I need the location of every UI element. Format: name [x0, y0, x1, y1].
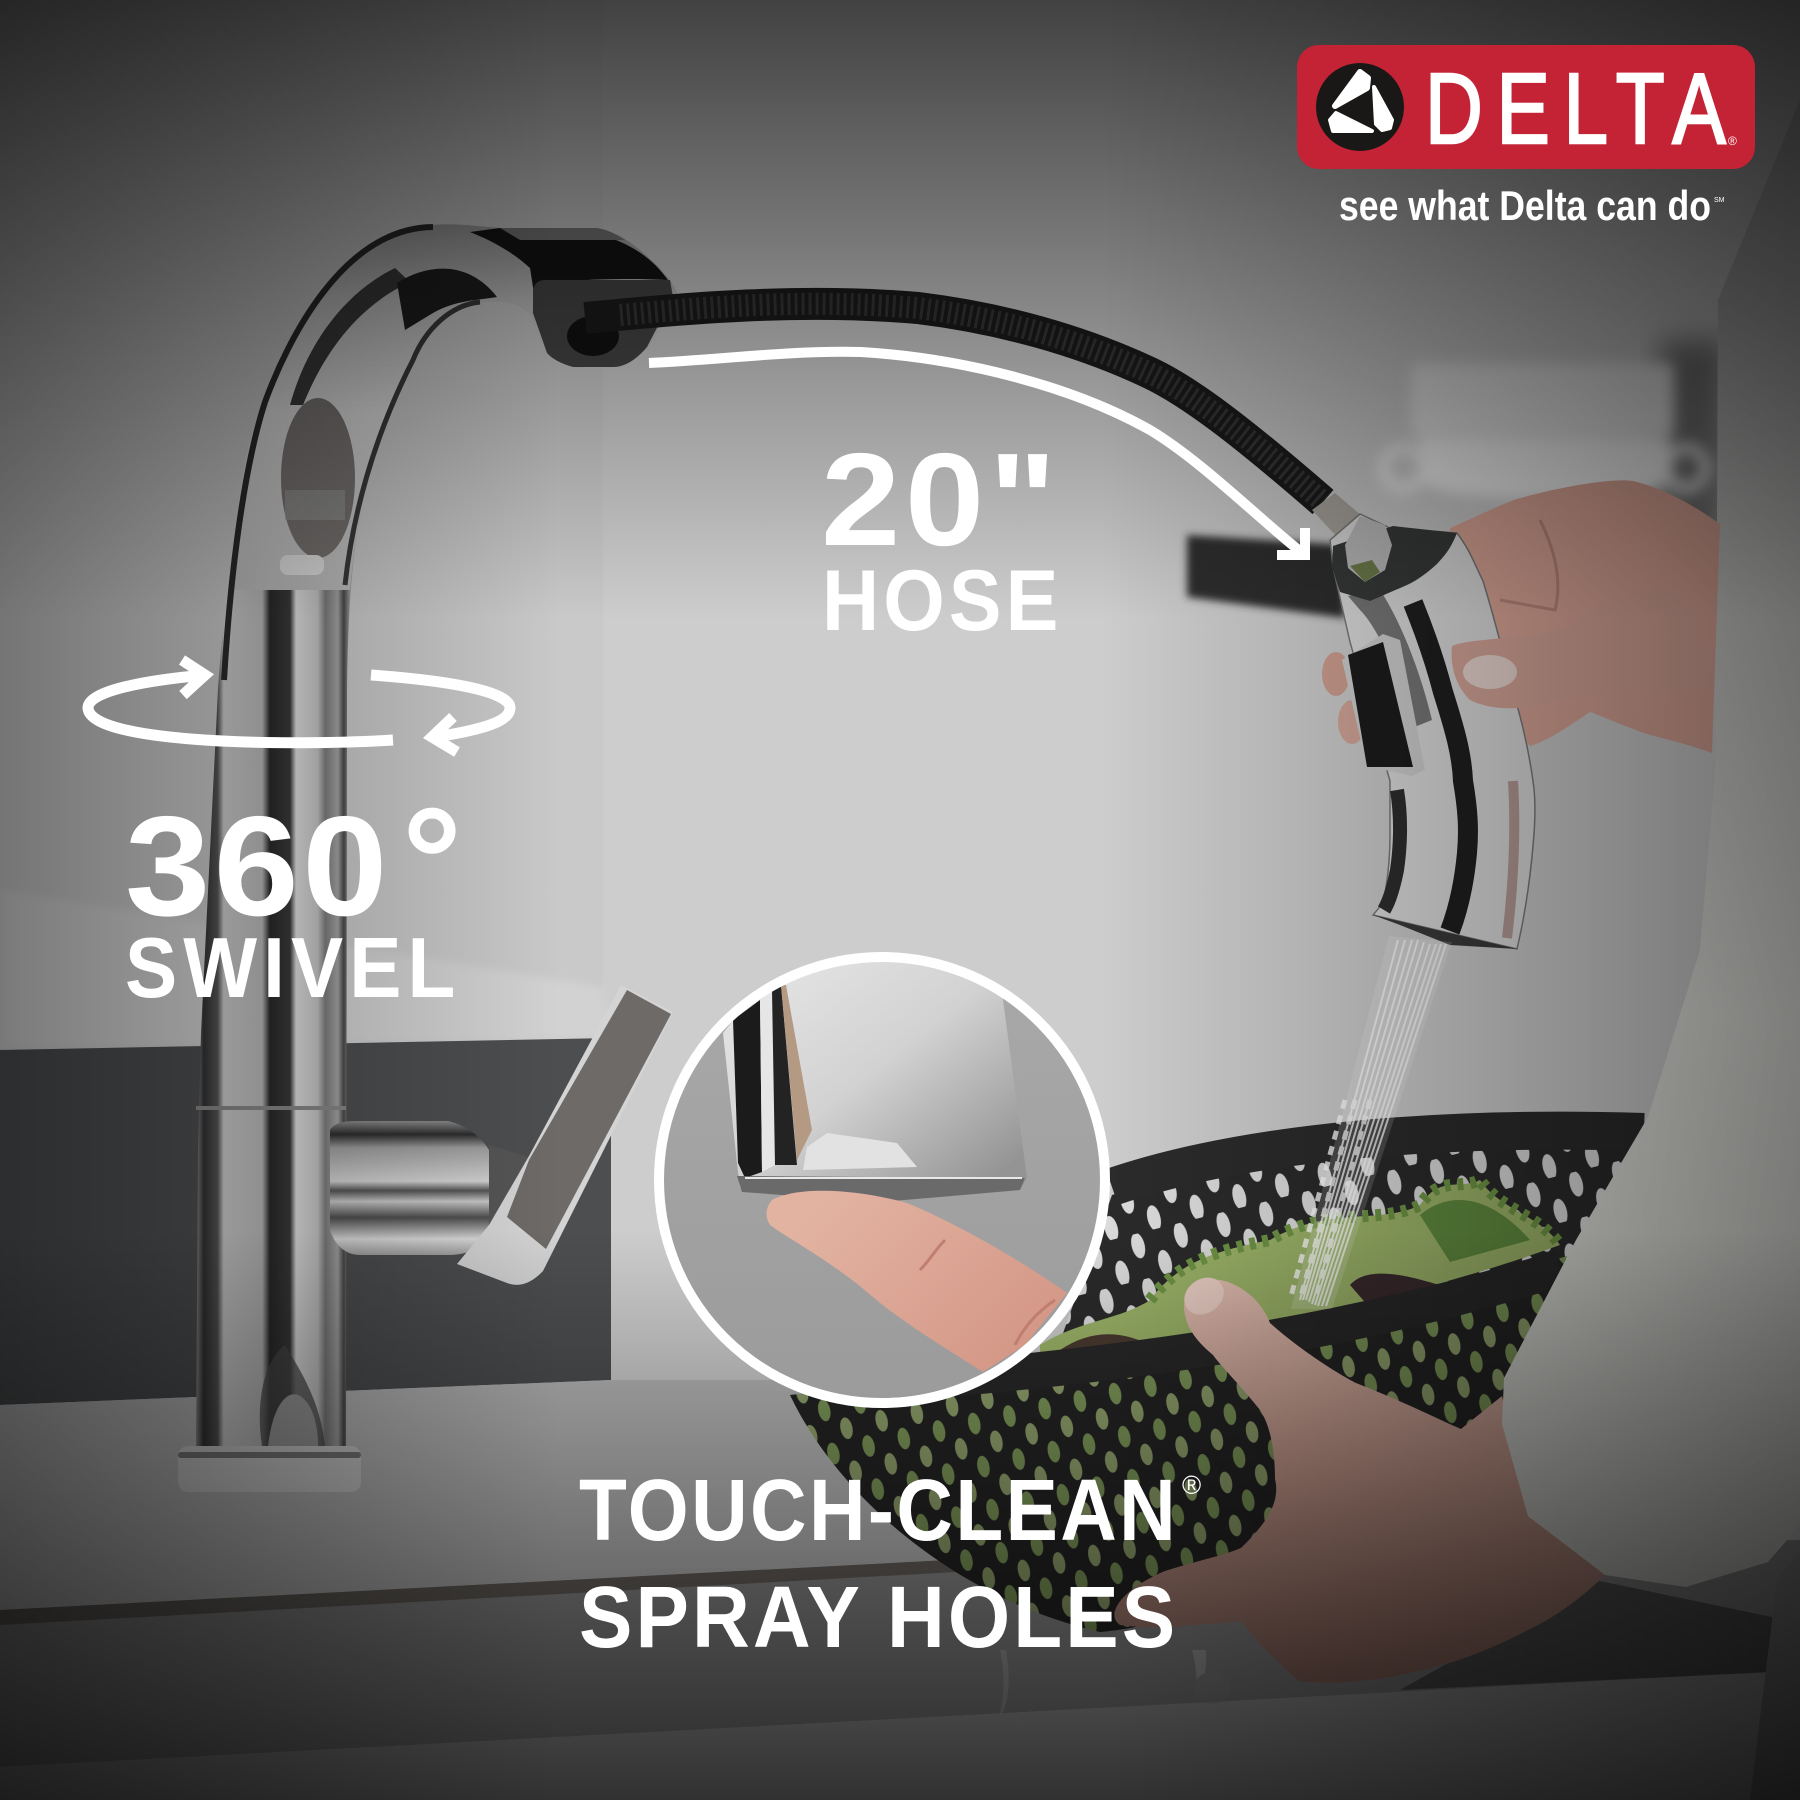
touch-clean spray holes label [579, 1461, 1201, 1666]
360 degree swivel label [125, 776, 462, 1016]
360 degree swivel label: ° [402, 776, 462, 944]
inset: touch-clean spray holes close-up [659, 950, 1105, 1403]
Delta logo: SM [1714, 197, 1725, 204]
20 inch hose label: HOSE [822, 552, 1058, 649]
touch-clean spray holes label: SPRAY HOLES [579, 1568, 1175, 1666]
inset spray head [723, 950, 1027, 1202]
colander back with mesh [1050, 1131, 1644, 1370]
touch-clean spray holes label: TOUCH-CLEAN [579, 1461, 1176, 1559]
hose length arrow [649, 352, 1305, 555]
Delta logo: DELTA [1425, 54, 1726, 165]
Delta logo: ® [1728, 134, 1737, 148]
logo emblem [1316, 63, 1404, 151]
360 degree swivel label: SWIVEL [125, 921, 455, 1016]
water drips [998, 1650, 1230, 1720]
360 degree swivel label: 360 [125, 787, 387, 946]
faucet handle [330, 985, 673, 1285]
lower hand holding colander [1114, 1270, 1605, 1682]
spray head [1330, 514, 1535, 949]
inset finger [766, 1191, 1067, 1372]
person's sleeve [1502, 100, 1800, 1800]
Delta logo: see what Delta can do [1339, 182, 1711, 229]
water spray [1290, 936, 1452, 1309]
salad leaves [1040, 1180, 1560, 1360]
upper hand holding spray head [1322, 480, 1720, 753]
20 inch hose label: 20" [821, 427, 1056, 574]
20 inch hose label [821, 427, 1058, 649]
colander front with mesh [790, 1256, 1567, 1632]
Delta logo [1297, 45, 1755, 229]
hose [585, 304, 1362, 540]
blurred cups and shelf [1187, 340, 1725, 618]
thumb on spray head [1452, 589, 1712, 708]
touch-clean spray holes label: ® [1182, 1470, 1201, 1500]
faucet body [178, 224, 677, 1492]
swivel rotation arrows [88, 660, 510, 752]
